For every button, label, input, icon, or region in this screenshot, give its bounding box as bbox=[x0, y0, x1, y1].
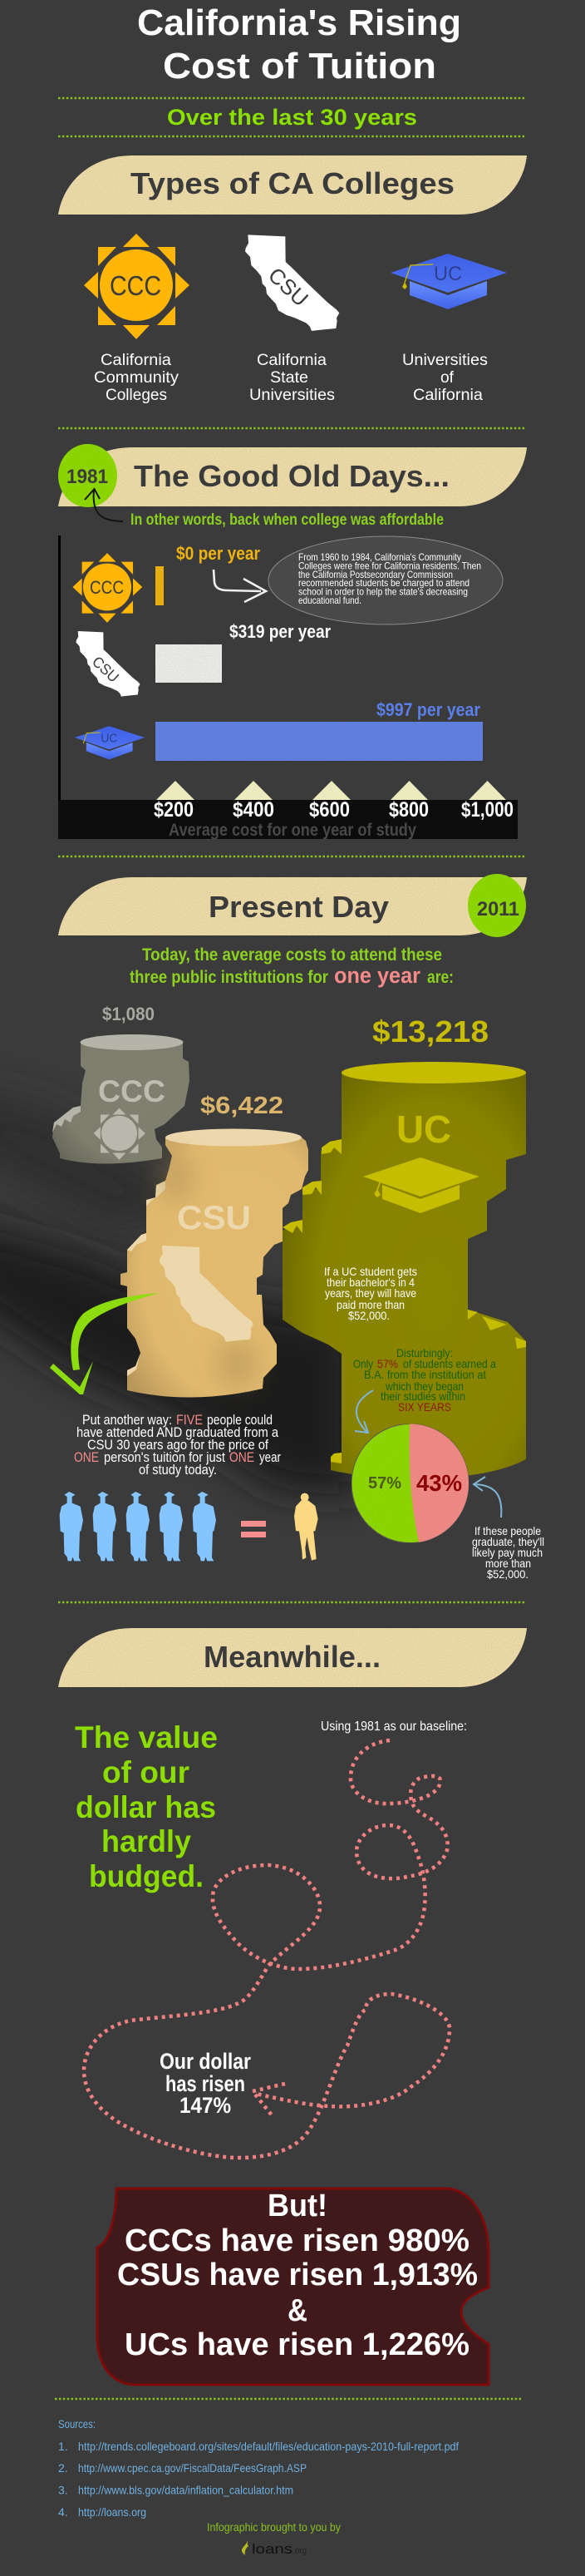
text: baseline note: Using 1981 as our baseline: bbox=[321, 1720, 467, 1734]
heading: types of CA colleges: Types of CA Colleges bbox=[130, 166, 455, 200]
badge: 2011 bbox=[468, 874, 526, 937]
heading: the good old days: The Good Old Days... bbox=[134, 459, 450, 493]
note: graduation rate bbox=[353, 1346, 496, 1414]
icon: UC cap small: UC bbox=[101, 732, 118, 745]
value: $0 per year: $0 per year bbox=[176, 543, 260, 564]
intro text: are: bbox=[427, 968, 454, 987]
note: graduation rate: Disturbingly: bbox=[396, 1346, 453, 1360]
logo: loans.org: .org bbox=[292, 2546, 307, 2556]
callout: CCC history: recommended students be charged to attend bbox=[298, 577, 469, 589]
arrow: black to 1981 bbox=[85, 489, 123, 521]
label: California Community Colleges bbox=[94, 352, 179, 404]
stack: CCC coins bbox=[52, 1034, 189, 1164]
x axis band: Average cost for one year of study bbox=[169, 821, 416, 840]
bar: CSU bbox=[155, 644, 222, 683]
pie chart: graduation rate: 43% bbox=[416, 1470, 462, 1496]
stack: UC coins: UC bbox=[396, 1108, 451, 1151]
icon: CCC sun: CCC bbox=[110, 270, 161, 301]
icon: CSU California map bbox=[245, 234, 339, 331]
sources: http://loans.org bbox=[78, 2505, 146, 2519]
note: UC four year cost bbox=[324, 1265, 417, 1322]
bar chart: 1981 costs bbox=[58, 535, 518, 840]
note: graduation rate: of students earned a bbox=[403, 1357, 496, 1370]
icon: equals sign bbox=[241, 1521, 266, 1537]
header bbox=[58, 2, 525, 136]
sources bbox=[58, 2417, 459, 2519]
bar: UC bbox=[155, 722, 483, 761]
label: California State Universities: Universities bbox=[249, 387, 335, 404]
note: graduates pay more: $52,000. bbox=[487, 1567, 528, 1581]
label: Universities of California: of bbox=[440, 369, 455, 387]
value: $13,218: $13,218 bbox=[372, 1014, 489, 1049]
label: California Community Colleges: Colleges bbox=[106, 387, 167, 404]
sources: Sources: bbox=[58, 2417, 96, 2430]
callout: CCC history: Colleges were free for California residents. Then bbox=[298, 560, 481, 571]
x axis band: $600 bbox=[309, 798, 350, 822]
note: graduates pay more: If these people bbox=[474, 1524, 541, 1537]
callout: but tuition has risen: But! bbox=[268, 2189, 327, 2223]
stack: CSU coins: CSU bbox=[177, 1200, 251, 1236]
title bbox=[137, 2, 461, 86]
note: graduates pay more: graduate, they'll bbox=[472, 1535, 544, 1548]
badge: 1981 bbox=[58, 444, 117, 507]
subtitle: Over the last 30 years bbox=[167, 105, 417, 130]
note: graduation rate: 57% bbox=[377, 1357, 398, 1370]
text: put another way: Put another way: bbox=[82, 1412, 172, 1428]
sources: http://www.cpec.ca.gov/FiscalData/FeesGraph.ASP bbox=[78, 2461, 307, 2475]
badge: 1981: 1981 bbox=[66, 466, 108, 488]
label: California State Universities bbox=[249, 352, 335, 404]
banner: types of colleges bbox=[58, 155, 527, 215]
x axis band: $800 bbox=[389, 798, 429, 822]
logo: loans.org: loans bbox=[252, 2541, 292, 2557]
note: graduation rate: their studies within bbox=[381, 1389, 465, 1403]
callout: CCC history bbox=[268, 536, 503, 624]
text: put another way: people could bbox=[207, 1412, 273, 1428]
icon: UC graduation cap: UC bbox=[434, 263, 462, 285]
label: California State Universities: State bbox=[270, 369, 308, 387]
callout: CCC history: From 1960 to 1984, California's Community bbox=[298, 551, 461, 563]
text: put another way: have attended AND graduated from a bbox=[76, 1424, 278, 1440]
logo: loans.org bbox=[242, 2540, 307, 2557]
text: value of our dollar: dollar has bbox=[76, 1790, 216, 1824]
sources: 1. bbox=[58, 2440, 68, 2453]
callout: but tuition has risen: UCs have risen 1,226% bbox=[125, 2327, 469, 2362]
panel: the good old days bbox=[58, 444, 527, 840]
title: Cost of Tuition bbox=[163, 46, 436, 86]
text: put another way: ONE bbox=[74, 1449, 99, 1465]
note: UC four year cost: their bachelor's in 4 bbox=[327, 1276, 415, 1289]
heading: meanwhile: Meanwhile... bbox=[204, 1640, 381, 1674]
title: California's Rising bbox=[137, 2, 461, 43]
sources: 2. bbox=[58, 2461, 68, 2475]
text: value of our dollar: budged. bbox=[89, 1859, 204, 1893]
text: put another way: FIVE bbox=[176, 1412, 203, 1428]
label: Universities of California: California bbox=[413, 387, 483, 404]
axis tick triangles bbox=[156, 781, 506, 800]
text: value of our dollar: hardly bbox=[101, 1824, 191, 1858]
panel: types of CA colleges bbox=[58, 155, 527, 404]
note: UC four year cost: paid more than bbox=[337, 1298, 405, 1311]
text: dollar risen 147% bbox=[160, 2049, 251, 2118]
subheading: back when college was affordable: In other words, back when college was affordable bbox=[130, 511, 444, 529]
callout: but tuition has risen: CSUs have risen 1,913% bbox=[117, 2258, 478, 2292]
label: California Community Colleges: Community bbox=[94, 369, 179, 387]
value: $6,422: $6,422 bbox=[200, 1093, 283, 1119]
chart axis bbox=[58, 535, 61, 802]
note: graduates pay more bbox=[472, 1524, 544, 1581]
label: Universities of California: Universities bbox=[402, 352, 488, 369]
icon: UC graduation cap bbox=[391, 254, 507, 309]
text: value of our dollar bbox=[75, 1720, 218, 1893]
stack: CSU coins bbox=[120, 1129, 308, 1398]
callout: CCC history: school in order to help the state's decreasing bbox=[298, 586, 468, 598]
sources: 3. bbox=[58, 2483, 68, 2496]
badge: 2011: 2011 bbox=[477, 898, 519, 920]
sources: http://trends.collegeboard.org/sites/default/files/education-pays-2010-full-report.pdf bbox=[78, 2440, 459, 2453]
text: value of our dollar: The value bbox=[75, 1720, 218, 1754]
callout: CCC history: educational fund. bbox=[298, 595, 361, 606]
callout: CCC history: the California Postsecondary Commission bbox=[298, 569, 453, 580]
text: put another way: year bbox=[259, 1449, 281, 1465]
panel: meanwhile bbox=[58, 1628, 527, 2385]
text: put another way bbox=[74, 1412, 281, 1478]
note: UC four year cost: If a UC student gets bbox=[324, 1265, 417, 1278]
icon: CSU map small bbox=[76, 631, 140, 697]
note: UC four year cost: years, they will have bbox=[325, 1286, 416, 1300]
note: graduation rate: Only bbox=[353, 1357, 373, 1370]
stack: CCC coins: CCC bbox=[98, 1074, 165, 1108]
note: UC four year cost: $52,000. bbox=[348, 1309, 390, 1322]
text: value of our dollar: of our bbox=[102, 1755, 189, 1789]
callout: but tuition has risen: & bbox=[288, 2293, 307, 2328]
sources: 4. bbox=[58, 2505, 68, 2519]
arrow: blue to pie bbox=[355, 1390, 373, 1433]
callout: but tuition has risen bbox=[97, 2189, 489, 2385]
label: California State Universities: California bbox=[257, 352, 327, 369]
icon: CCC sun bbox=[84, 234, 189, 339]
icon: CSU map small: CSU bbox=[89, 653, 122, 686]
callout: but tuition has risen: CCCs have risen 980% bbox=[125, 2223, 469, 2258]
text: put another way: person's tuition for just bbox=[104, 1449, 225, 1465]
text: put another way: of study today. bbox=[139, 1462, 217, 1478]
icon: UC cap small bbox=[75, 726, 145, 759]
note: graduation rate: B.A. from the institution at bbox=[364, 1368, 486, 1381]
x axis band: $1,000 bbox=[461, 798, 514, 822]
x axis band bbox=[58, 798, 518, 840]
note: graduates pay more: more than bbox=[485, 1557, 531, 1570]
label: Universities of California bbox=[402, 352, 488, 404]
value: $1,080: $1,080 bbox=[102, 1004, 155, 1024]
note: graduation rate: which they began bbox=[385, 1379, 464, 1393]
arrow: white to note bbox=[214, 570, 266, 602]
note: graduates pay more: likely pay much bbox=[472, 1546, 543, 1559]
text: dollar risen 147%: has risen bbox=[165, 2071, 245, 2096]
icon: single person bbox=[294, 1493, 318, 1561]
credit text: Infographic brought to you by bbox=[207, 2520, 341, 2534]
panel: present day bbox=[0, 874, 544, 1581]
text: put another way: CSU 30 years ago for the price of bbox=[87, 1437, 268, 1453]
stack: UC coins bbox=[283, 1062, 526, 1478]
label: California Community Colleges: California bbox=[101, 352, 171, 369]
banner: meanwhile bbox=[58, 1628, 527, 1687]
background shadow bbox=[0, 1085, 357, 1497]
banner: present day bbox=[58, 877, 527, 935]
text: put another way: ONE bbox=[229, 1449, 254, 1465]
banner: good old days bbox=[58, 447, 527, 506]
bar: CCC bbox=[155, 566, 164, 605]
pie chart: graduation rate bbox=[351, 1424, 469, 1543]
icon: CCC sun small bbox=[72, 553, 142, 623]
icon: CSU California map: CSU bbox=[263, 263, 313, 311]
x axis band: $200 bbox=[154, 798, 194, 822]
text: dollar risen 147%: Our dollar bbox=[160, 2049, 251, 2074]
intro text bbox=[130, 945, 454, 988]
icon: five graduates bbox=[60, 1492, 216, 1561]
note: graduation rate: SIX YEARS bbox=[398, 1400, 451, 1414]
x axis band: $400 bbox=[233, 798, 274, 822]
arrow: green to people bbox=[50, 1293, 160, 1394]
icon: CCC sun small: CCC bbox=[90, 577, 124, 598]
icon: cap silhouette bbox=[363, 1157, 479, 1213]
value: $997 per year: $997 per year bbox=[376, 699, 480, 720]
dotted path: dollar rise bbox=[84, 1740, 450, 2158]
pie chart: graduation rate: 57% bbox=[368, 1474, 401, 1493]
heading: present day: Present Day bbox=[209, 890, 389, 924]
arrow: blue to pie, right bbox=[474, 1477, 501, 1517]
text: dollar risen 147%: 147% bbox=[179, 2093, 231, 2118]
intro text: Today, the average costs to attend these bbox=[142, 945, 442, 965]
value: $319 per year: $319 per year bbox=[229, 621, 331, 642]
intro text: one year bbox=[334, 963, 420, 988]
sources: http://www.bls.gov/data/inflation_calculator.htm bbox=[78, 2483, 293, 2496]
intro text: three public institutions for bbox=[130, 968, 328, 987]
